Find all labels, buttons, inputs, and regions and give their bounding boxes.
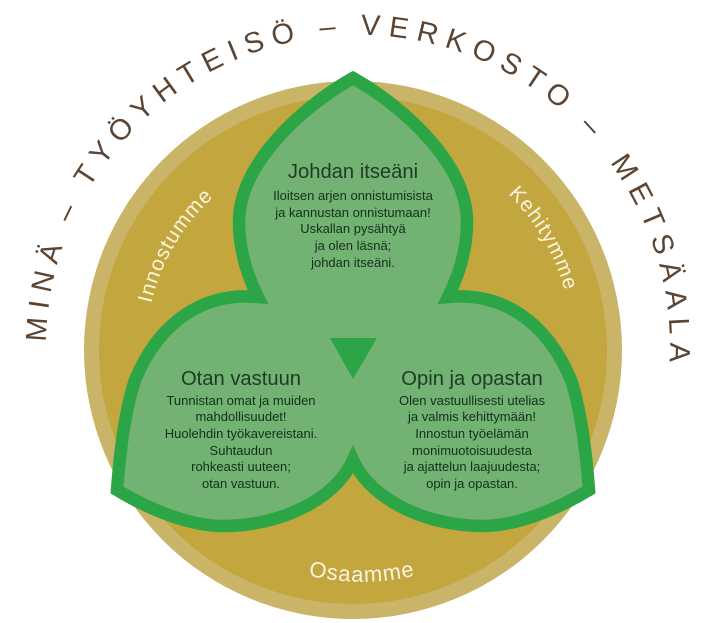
- panel: Otan vastuun: rohkeasti uuteen;: [191, 459, 291, 474]
- background circle: [84, 81, 622, 619]
- panel: Johdan itseäni: Johdan itseäni: [288, 161, 418, 183]
- panel: Johdan itseäni: Iloitsen arjen onnistumisista: [273, 188, 434, 203]
- panel: Otan vastuun: Otan vastuun: [181, 368, 301, 390]
- circular heading: levels from self to forest: MINÄ – TYÖYHTEISÖ – VERKOSTO – METSÄALA: [26, 14, 690, 362]
- curved label: Osaamme: Osaamme: [310, 562, 413, 582]
- panel: Otan vastuun: [165, 368, 317, 491]
- panel: Johdan itseäni: ja kannustan onnistumaan!: [274, 205, 431, 220]
- panel: Opin ja opastan: Innostun työelämän: [415, 426, 529, 441]
- center triangle: [330, 338, 377, 379]
- panel: Opin ja opastan: Olen vastuullisesti utelias: [399, 393, 545, 408]
- panel: Otan vastuun: mahdollisuudet!: [195, 409, 287, 424]
- panel: Johdan itseäni: johdan itseäni.: [310, 255, 395, 270]
- panel: Opin ja opastan: monimuotoisuudesta: [412, 443, 533, 458]
- panel: Opin ja opastan: Opin ja opastan: [401, 368, 543, 390]
- panel: Johdan itseäni: [273, 161, 434, 270]
- curved label: Kehitymme: Kehitymme: [509, 185, 574, 288]
- curved label: Innostumme: Innostumme: [138, 192, 211, 302]
- panel: Opin ja opastan: [399, 368, 545, 491]
- panel: Otan vastuun: otan vastuun.: [202, 476, 280, 491]
- panel: Opin ja opastan: ja ajattelun laajuudesta;: [403, 459, 540, 474]
- panel: Otan vastuun: Huolehdin työkavereistani.: [165, 426, 317, 441]
- panel: Johdan itseäni: Uskallan pysähtyä: [300, 221, 407, 236]
- panel: Johdan itseäni: ja olen läsnä;: [314, 238, 391, 253]
- panel: Otan vastuun: Tunnistan omat ja muiden: [166, 393, 316, 408]
- panel: Opin ja opastan: ja valmis kehittymään!: [407, 409, 536, 424]
- trefoil shape: [117, 78, 589, 526]
- panel: Opin ja opastan: opin ja opastan.: [426, 476, 518, 491]
- panel: Otan vastuun: Suhtaudun: [210, 443, 272, 458]
